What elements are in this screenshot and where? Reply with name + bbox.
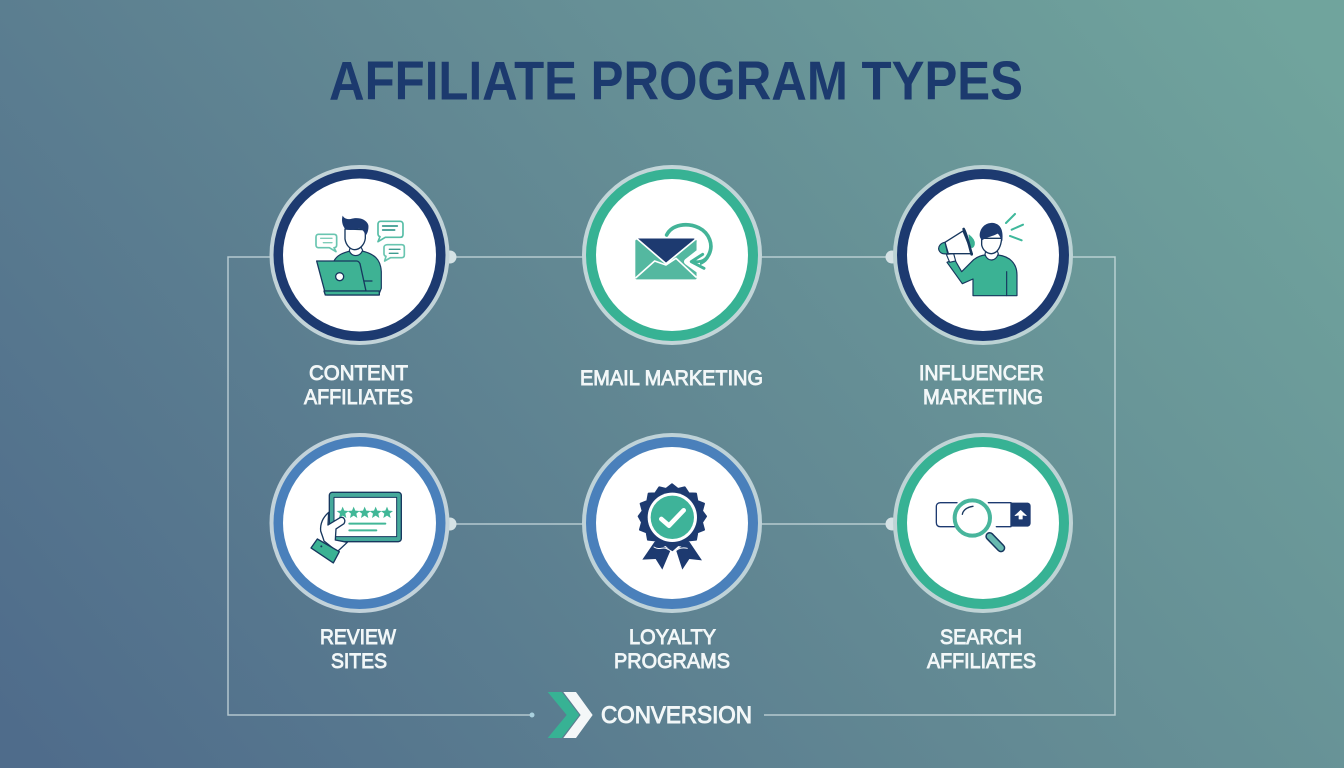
icon: award badge with checkmark [639, 484, 706, 570]
label: REVIEW [320, 625, 397, 649]
ring [272, 435, 448, 611]
label: INFLUENCER [919, 361, 1044, 385]
panel: content affiliates [272, 167, 448, 409]
label: AFFILIATES [304, 385, 413, 409]
panel: search affiliates [895, 435, 1071, 673]
title: AFFILIATE PROGRAM TYPES [329, 50, 1023, 112]
label: LOYALTY [629, 625, 716, 649]
panel: review sites [272, 435, 448, 673]
icon: person with megaphone [939, 214, 1023, 296]
ring [895, 435, 1071, 611]
panel: email marketing [580, 167, 763, 390]
ring [272, 167, 448, 343]
label: CONTENT [309, 361, 408, 385]
icon: search bar with magnifier [936, 500, 1031, 548]
label [614, 625, 730, 673]
icon: hand holding review tablet [311, 492, 401, 563]
label: AFFILIATES [927, 649, 1036, 673]
ring [584, 167, 760, 343]
connector nodes [444, 250, 898, 718]
conversion marker [548, 692, 752, 738]
ring [584, 435, 760, 611]
label: CONVERSION [601, 702, 752, 729]
icon: envelope with return arrow [635, 225, 711, 279]
label [919, 361, 1044, 409]
label: EMAIL MARKETING [580, 366, 763, 390]
panel: influencer marketing [895, 167, 1071, 409]
ring [895, 167, 1071, 343]
label [304, 361, 413, 409]
icon: person with laptop and chat bubbles [316, 216, 404, 295]
label [927, 625, 1036, 673]
label: SITES [331, 649, 387, 673]
icon: double chevron [548, 692, 593, 738]
label: MARKETING [923, 385, 1043, 409]
connector lines [228, 257, 1115, 715]
label: SEARCH [940, 625, 1022, 649]
panel: loyalty programs [584, 435, 760, 673]
label [320, 625, 397, 673]
label: PROGRAMS [614, 649, 730, 673]
